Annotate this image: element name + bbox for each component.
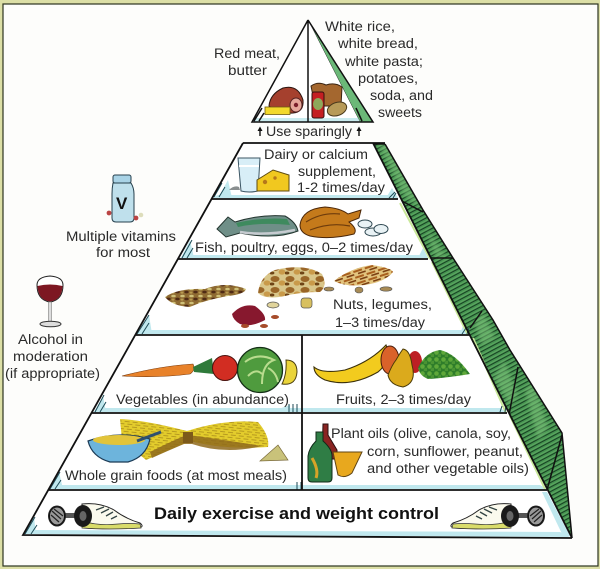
- icon: bowl of grains: [88, 432, 161, 462]
- text: dairy: Dairy or calcium: [264, 147, 368, 162]
- text: fruits: Fruits, 2–3 times/day: [336, 392, 471, 407]
- icon: vitamin bottle: [107, 175, 143, 222]
- icon: right dumbbell and shoe: [451, 504, 545, 529]
- label: use sparingly with arrows: Use sparingly: [266, 124, 352, 139]
- icon: cheese: [257, 170, 289, 191]
- icon: wine glass: [37, 276, 63, 327]
- text: refined carbohydrates: white pasta;: [344, 54, 423, 69]
- text: plant oils: [331, 426, 529, 476]
- title: exercise tier: Daily exercise and weight control: [154, 505, 439, 523]
- text: red meat: Red meat,: [214, 46, 280, 61]
- icon: left dumbbell and shoe: [48, 504, 142, 529]
- text: dairy: [264, 147, 385, 195]
- icon: nuts and legumes: [165, 265, 393, 328]
- text: alcohol: (if appropriate): [5, 366, 100, 381]
- text: refined carbohydrates: white bread,: [337, 36, 418, 51]
- text: refined carbohydrates: soda, and: [370, 88, 433, 103]
- text: plant oils: corn, sunflower, peanut,: [367, 444, 523, 459]
- tier corner hatching: [25, 183, 506, 534]
- text: alcohol: Alcohol in: [18, 332, 83, 347]
- text: red meat: butter: [228, 63, 268, 78]
- icon: butter: [265, 107, 290, 114]
- top triangle: [252, 20, 373, 122]
- tier inner edge tint: [400, 203, 545, 489]
- text: plant oils: Plant oils (olive, canola, soy,: [331, 426, 511, 441]
- icon: potato: [325, 99, 349, 119]
- text: dairy: 1-2 times/day: [297, 180, 385, 195]
- icon: roast chicken: [300, 207, 361, 238]
- icon: wheat sheaf: [120, 419, 268, 460]
- pyramid shaded right side: [373, 144, 572, 538]
- icon: fish: [217, 216, 298, 237]
- text: multiple vitamins: [66, 229, 176, 260]
- icon: grain pile: [260, 445, 288, 461]
- text: refined carbohydrates: [325, 19, 433, 120]
- text: multiple vitamins: Multiple vitamins: [66, 229, 176, 244]
- text: nuts legumes: [333, 297, 432, 330]
- icon: soda can: [312, 92, 324, 118]
- text: nuts legumes: Nuts, legumes,: [333, 297, 432, 312]
- icon: vegetables: [122, 348, 297, 392]
- tier faces: [23, 143, 572, 538]
- text: multiple vitamins: for most: [96, 245, 150, 260]
- tier blue shading: [24, 180, 570, 537]
- icon: red meat: [269, 87, 303, 113]
- text: plant oils: and other vegetable oils): [367, 461, 529, 476]
- text: alcohol: moderation: [13, 349, 88, 364]
- icon: oil bottles and cup: [308, 424, 362, 482]
- text: nuts legumes: 1–3 times/day: [335, 315, 425, 330]
- text: dairy: supplement,: [298, 164, 376, 179]
- text: fish poultry eggs: Fish, poultry, eggs, 0–2 times/day: [195, 240, 413, 255]
- text: alcohol: [5, 332, 100, 381]
- icon: eggs: [358, 220, 388, 236]
- icon: fruits: [314, 345, 470, 387]
- icon: white bread: [311, 83, 342, 106]
- pyramid outline and tier lines: [23, 143, 572, 538]
- text: refined carbohydrates: sweets: [378, 105, 422, 120]
- text: vegetables: Vegetables (in abundance): [116, 392, 289, 407]
- text: whole grains: Whole grain foods (at most meals): [65, 468, 287, 483]
- icon: vitamin bottle: V: [116, 194, 128, 213]
- icon: glass of milk: [229, 158, 260, 192]
- text: red meat: [214, 46, 280, 78]
- text: refined carbohydrates: White rice,: [325, 19, 395, 34]
- text: refined carbohydrates: potatoes,: [358, 71, 418, 86]
